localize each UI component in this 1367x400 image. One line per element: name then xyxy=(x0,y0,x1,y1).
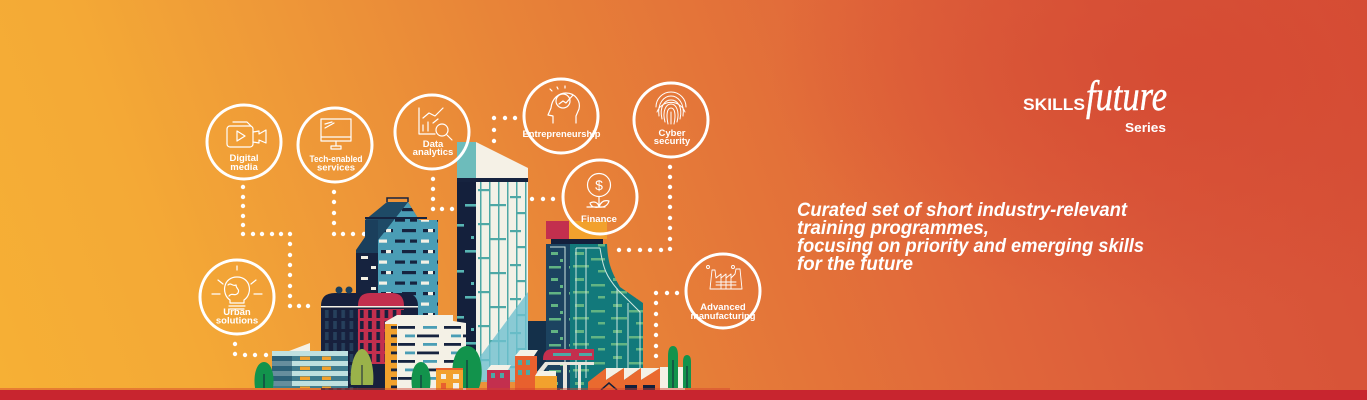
badge: Entrepreneurship xyxy=(522,79,601,153)
badge: Digital media: media xyxy=(230,162,258,173)
logo: SkillsFuture Series: Series xyxy=(1125,120,1166,135)
logo: SkillsFuture Series xyxy=(1023,74,1167,135)
badge: Urban solutions: solutions xyxy=(216,316,258,326)
badge: Advanced manufacturing: manufacturing xyxy=(690,311,756,322)
building: blue skyscraper xyxy=(356,198,438,323)
badge: Advanced manufacturing: Advanced xyxy=(700,302,746,313)
badge: Tech-enabled services: Tech-enabled xyxy=(310,154,363,165)
icon: head with growth arrow xyxy=(548,86,579,123)
badge: Entrepreneurship: Entrepreneurship xyxy=(522,129,601,140)
tagline xyxy=(797,199,1144,275)
badge: Data analytics: Data xyxy=(423,139,444,150)
icon: puzzle lightbulb xyxy=(212,266,262,309)
logo: SkillsFuture Series: future xyxy=(1086,74,1167,120)
badge: Urban solutions xyxy=(200,260,274,334)
icon: fingerprint xyxy=(656,92,686,124)
building: rail and shops xyxy=(487,349,594,390)
badge: Finance: Finance xyxy=(581,214,617,225)
ground strip xyxy=(0,388,1367,400)
badge: Cyber security xyxy=(634,83,708,157)
badge: Data analytics xyxy=(395,95,469,169)
badge: Tech-enabled services xyxy=(298,108,372,182)
icon: factory xyxy=(706,266,742,289)
icon: monitor xyxy=(321,119,351,149)
building: dark red-domed block xyxy=(321,286,418,390)
trees xyxy=(254,346,691,388)
badge: Cyber security: security xyxy=(654,136,691,147)
badge: Digital media xyxy=(207,105,281,179)
building: white office block xyxy=(385,315,466,390)
icon: chart with magnifier xyxy=(419,108,452,140)
badge: Data analytics: analytics xyxy=(413,147,453,158)
logo: SkillsFuture Series: SKILLS xyxy=(1023,95,1085,114)
tagline: training programmes, xyxy=(797,217,989,239)
badge: Finance: $ xyxy=(595,177,603,193)
badge: Cyber security: Cyber xyxy=(659,128,686,139)
building: low dark block behind xyxy=(528,321,546,381)
building: factory xyxy=(588,367,685,390)
badge: Urban solutions: Urban xyxy=(223,307,251,318)
icon: video camera xyxy=(227,122,266,147)
dotted connector lines xyxy=(233,116,679,358)
tagline: focusing on priority and emerging skills xyxy=(797,235,1144,257)
badge: Digital media: Digital xyxy=(229,153,259,164)
building: low-rise block xyxy=(272,343,348,388)
badge: Advanced manufacturing xyxy=(686,254,760,328)
city skyline illustration xyxy=(254,142,691,390)
tagline: Curated set of short industry-relevant xyxy=(797,199,1128,221)
badge: Finance xyxy=(563,160,637,234)
badge: Tech-enabled services: services xyxy=(317,162,355,174)
building: green curved tower xyxy=(546,221,643,390)
tagline: for the future xyxy=(797,253,913,275)
building: central tower xyxy=(457,142,528,382)
building: small orange house xyxy=(436,368,463,390)
icon: dollar plant xyxy=(587,174,610,207)
